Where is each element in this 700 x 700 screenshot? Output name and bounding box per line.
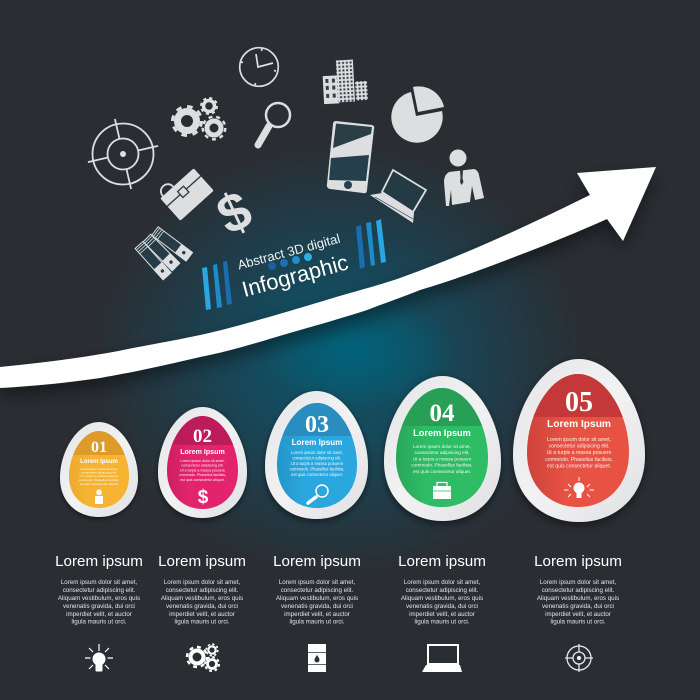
- text block 1: Aliquam vestibulum, eros quis: [58, 595, 140, 602]
- egg card 05: 05: [565, 387, 593, 418]
- egg card 02: est quis consectetur aliquet.: [180, 478, 225, 482]
- egg card 04: consectetur adipiscing elit.: [415, 450, 469, 455]
- text block 5: Aliquam vestibulum, eros quis: [537, 595, 619, 602]
- icon: binders: [135, 226, 193, 280]
- text block 4: imperdiet velit, et auctor: [409, 611, 475, 618]
- text block 2: imperdiet velit, et auctor: [169, 611, 235, 618]
- text block 3: venenatis gravida, dui orci: [281, 603, 353, 610]
- icon: clock: [240, 48, 278, 86]
- text block 4: venenatis gravida, dui orci: [406, 603, 478, 610]
- text block 2: [158, 553, 246, 626]
- icon: oil barrel: [308, 644, 326, 672]
- egg card 01: est quis consectetur aliquet.: [80, 482, 118, 486]
- title: Abstract 3D digital Infographic: Infographic: [239, 250, 351, 302]
- text block 4: [398, 553, 486, 626]
- egg card 04: 04: [430, 400, 455, 427]
- egg card 05: Lorem ipsum dolor sit amet,: [547, 437, 611, 443]
- egg card 03: Lorem ipsum dolor sit amet,: [291, 450, 343, 455]
- text block 3: Lorem ipsum: [273, 553, 361, 570]
- icon: tablet phone: [327, 121, 374, 193]
- egg card 04: [384, 376, 501, 521]
- egg card 02: 02: [193, 426, 212, 447]
- egg card 03: [265, 391, 368, 519]
- text block 3: Lorem ipsum dolor sit amet,: [279, 579, 355, 586]
- text block 3: [273, 553, 361, 626]
- text block 1: Lorem ipsum: [55, 553, 143, 570]
- egg card 02: [158, 407, 250, 518]
- icon: magnifier: [258, 103, 290, 145]
- egg card 01: Ut a turpis a massa posuere: [80, 474, 119, 478]
- text block 1: Lorem ipsum dolor sit amet,: [61, 579, 137, 586]
- text block 5: [534, 553, 622, 626]
- egg card 01: Lorem Ipsum: [80, 459, 118, 465]
- text block 3: imperdiet velit, et auctor: [284, 611, 350, 618]
- text block 5: Lorem ipsum dolor sit amet,: [540, 579, 616, 586]
- egg card 01: 01: [91, 439, 107, 456]
- text block 5: venenatis gravida, dui orci: [542, 603, 614, 610]
- text block 2: consectetur adipiscing elit.: [166, 587, 239, 594]
- egg card 03: Ut a turpis a massa posuere: [291, 461, 344, 466]
- icon: white target: [565, 644, 593, 672]
- egg card 04: Lorem ipsum dolor sit amet,: [413, 444, 471, 449]
- egg card 01: [60, 422, 140, 517]
- text block 1: ligula mauris ut orci.: [71, 618, 127, 626]
- egg card 04: Lorem Ipsum: [413, 428, 471, 438]
- egg card 05: consectetur adipiscing elit.: [549, 444, 609, 450]
- text block 1: venenatis gravida, dui orci: [63, 603, 135, 610]
- egg card 04: est quis consectetur aliquet.: [413, 469, 471, 474]
- text block 4: Aliquam vestibulum, eros quis: [401, 595, 483, 602]
- text block 4: ligula mauris ut orci.: [414, 618, 470, 626]
- blue bars right of title: [356, 219, 386, 269]
- text block 2: Lorem ipsum dolor sit amet,: [164, 579, 240, 586]
- text block 1: imperdiet velit, et auctor: [66, 611, 132, 618]
- text block 5: imperdiet velit, et auctor: [545, 611, 611, 618]
- icon: light bulb: [85, 644, 113, 672]
- blue bars left of title: [202, 261, 232, 310]
- icon: businessman: [444, 150, 484, 206]
- text block 5: consectetur adipiscing elit.: [542, 587, 615, 594]
- text block 3: consectetur adipiscing elit.: [281, 587, 354, 594]
- growth arrow: [0, 167, 656, 388]
- text block 4: Lorem ipsum dolor sit amet,: [404, 579, 480, 586]
- text block 2: ligula mauris ut orci.: [174, 618, 230, 626]
- icon: white laptop: [422, 645, 462, 672]
- egg card 01: consectetur adipiscing elit.: [81, 470, 117, 474]
- egg card 02: commodo. Phasellus facilisis,: [179, 473, 226, 477]
- egg card 02: $: [198, 487, 209, 508]
- icon: white gears: [187, 644, 219, 671]
- egg card 05: Lorem Ipsum: [547, 419, 611, 430]
- icon: gears: [172, 98, 225, 139]
- text block 4: Lorem ipsum: [398, 553, 486, 570]
- icon: pie chart: [391, 86, 444, 143]
- text block 4: consectetur adipiscing elit.: [406, 587, 479, 594]
- text block 5: Lorem ipsum: [534, 553, 622, 570]
- text block 2: venenatis gravida, dui orci: [166, 603, 238, 610]
- egg card 03: 03: [305, 412, 329, 438]
- egg card 02: Lorem Ipsum: [180, 448, 225, 456]
- text block 5: ligula mauris ut orci.: [550, 618, 606, 626]
- egg card 05: Ut a turpis a massa posuere: [547, 450, 612, 456]
- egg card 03: Lorem Ipsum: [292, 438, 342, 447]
- text block 2: Aliquam vestibulum, eros quis: [161, 595, 243, 602]
- egg card 02: consectetur adipiscing elit.: [181, 464, 224, 468]
- egg card 05: commodo. Phasellus facilisis,: [545, 457, 613, 463]
- egg card 03: est quis consectetur aliquet.: [291, 472, 343, 477]
- text block 3: ligula mauris ut orci.: [289, 618, 345, 626]
- egg card 04: commodo. Phasellus facilisis,: [411, 462, 473, 468]
- egg card 01: commodo. Phasellus facilisis,: [79, 478, 119, 482]
- text block 1: [55, 553, 143, 626]
- egg card 04: Ut a turpis a massa posuere: [413, 456, 472, 462]
- icon: dollar sign: $: [208, 179, 261, 246]
- egg card 03: commodo. Phasellus facilisis,: [290, 466, 344, 472]
- egg card 03: consectetur adipiscing elit.: [292, 456, 342, 460]
- title dots: [268, 253, 312, 270]
- title: Abstract 3D digital Infographic: Abstract 3D digital: [236, 231, 342, 273]
- egg card 02: Lorem ipsum dolor sit amet,: [180, 459, 225, 463]
- egg card 02: Ut a turpis a massa posuere: [180, 468, 225, 472]
- text block 2: Lorem ipsum: [158, 553, 246, 570]
- icon: briefcase: [155, 163, 214, 221]
- text block 3: Aliquam vestibulum, eros quis: [276, 595, 358, 602]
- text block 1: consectetur adipiscing elit.: [63, 587, 136, 594]
- egg card 05: est quis consectetur aliquet.: [547, 464, 611, 470]
- egg card 01: Lorem ipsum dolor sit amet,: [80, 467, 118, 471]
- icon: city buildings: [322, 59, 368, 104]
- egg card 05: [513, 359, 645, 522]
- icon: laptop: [370, 170, 426, 223]
- icon: target crosshair: [80, 111, 166, 197]
